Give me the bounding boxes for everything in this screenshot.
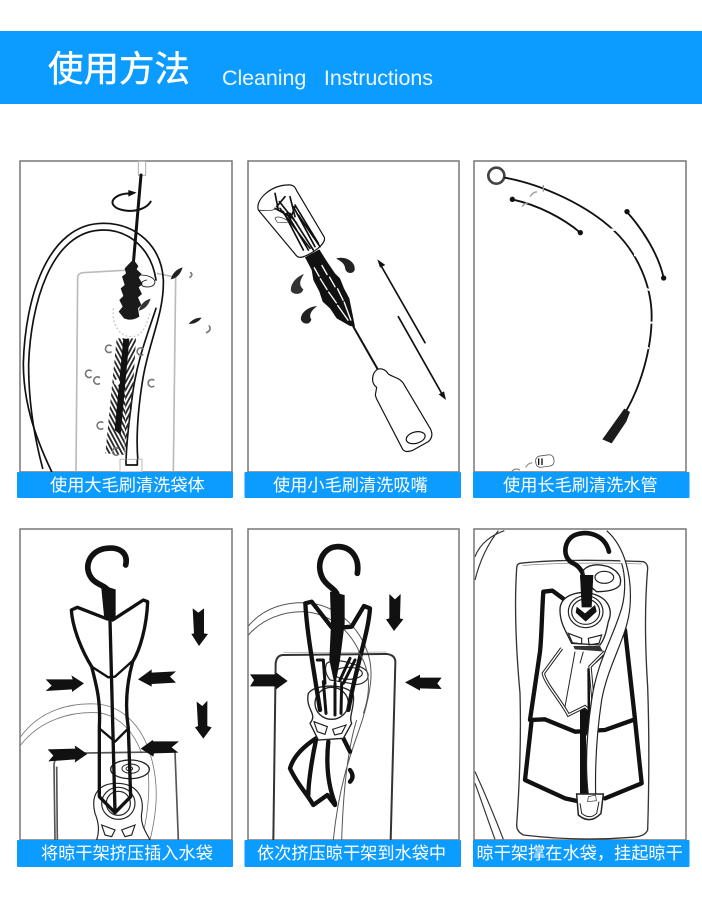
arrows: up and down motion — [377, 259, 446, 400]
panel: squeeze rack into bag in turn — [244, 529, 461, 867]
caption: 依次挤压晾干架到水袋中 — [257, 843, 446, 863]
illustration: rack entering bag — [21, 548, 212, 840]
caption — [17, 472, 233, 498]
water droplets — [336, 258, 355, 273]
panel: clean mouthpiece with small brush — [244, 161, 461, 498]
drying rack — [71, 548, 148, 813]
title: English: Cleaning Instructions — [222, 66, 433, 90]
drying rack — [305, 547, 370, 715]
caption: 晾干架撑在水袋，挂起晾干 — [476, 843, 683, 863]
caption — [244, 472, 461, 498]
panel: rack inside bag, hung to dry — [473, 529, 690, 867]
caption: 使用长毛刷清洗水管 — [503, 475, 658, 495]
rack panels — [525, 591, 642, 802]
arrows: squeeze and insert — [250, 594, 442, 691]
arrows: squeeze and insert — [46, 608, 212, 763]
title: Chinese: 使用方法 — [48, 49, 190, 89]
illustration: bag held open by rack — [475, 531, 649, 839]
caption: 使用小毛刷清洗吸嘴 — [273, 475, 428, 495]
arrow: along tube top — [510, 197, 583, 235]
D-ring — [577, 794, 603, 820]
illustration: small brush in mouthpiece — [258, 185, 446, 452]
caption: 将晾干架挤压插入水袋 — [41, 843, 213, 863]
illustration: long brush — [488, 168, 666, 472]
panel: clean bag body with large brush — [17, 161, 233, 498]
header banner — [0, 31, 702, 104]
water droplets — [85, 273, 210, 455]
arrow: along tube side — [624, 209, 666, 281]
caption: 使用大毛刷清洗袋体 — [50, 475, 205, 495]
bag mouth — [560, 593, 610, 645]
illustration: large brush in bag — [23, 161, 210, 472]
caption — [17, 840, 233, 867]
hose over bag mouth — [358, 652, 368, 713]
caption — [473, 472, 690, 498]
hose — [587, 531, 630, 795]
caption — [244, 840, 461, 867]
illustration: rack half inside bag — [248, 547, 442, 840]
bite valve — [583, 565, 621, 592]
panel: clean tube with long brush — [473, 161, 690, 498]
panel: squeeze rack and insert — [17, 529, 233, 867]
